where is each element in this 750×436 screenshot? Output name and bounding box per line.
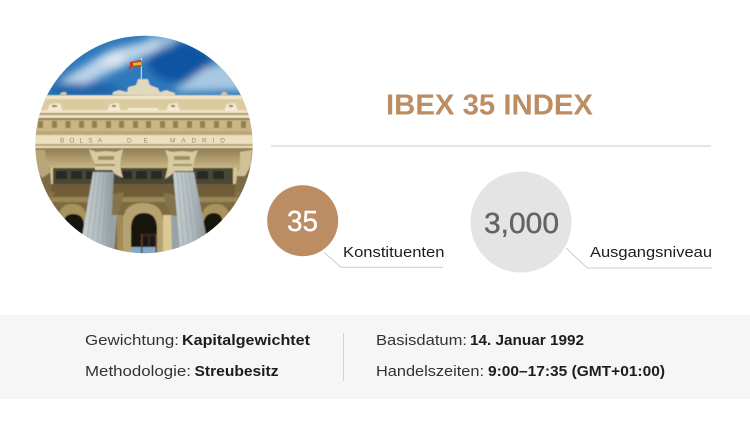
side capitals — [35, 150, 51, 178]
right arch — [201, 204, 229, 237]
label: Konstituenten: Konstituenten — [343, 244, 444, 261]
stat: constituents — [267, 185, 444, 267]
info: trading hours: Handelszeiten: — [376, 363, 484, 380]
lower capitals — [112, 192, 124, 214]
beam — [30, 184, 260, 197]
left arch — [59, 204, 86, 224]
info: base date — [376, 332, 584, 349]
info: base date: Basisdatum: — [376, 332, 467, 349]
coffered ceiling — [53, 168, 233, 184]
secondary columns — [110, 214, 118, 249]
center arch — [122, 202, 164, 252]
roof sculpture — [59, 79, 228, 96]
leader line — [566, 248, 712, 268]
inscription: MADRID — [170, 138, 225, 144]
badge: 3,000 — [470, 172, 572, 272]
inscription: DE — [127, 138, 149, 144]
leader line — [324, 252, 443, 267]
inscription: BOLSA — [60, 138, 103, 144]
value: 35: 35 — [287, 206, 318, 238]
side walls — [40, 166, 52, 195]
label: Ausgangsniveau: Ausgangsniveau — [590, 244, 712, 261]
sky — [44, 36, 244, 100]
main columns — [82, 172, 114, 250]
title: IBEX 35 INDEX — [386, 90, 594, 122]
info: methodology: Methodologie: — [85, 363, 191, 380]
stat: starting level — [470, 172, 712, 272]
soffit — [30, 148, 260, 168]
info: trading hours: 9:00–17:35 (GMT+01:00) — [488, 363, 665, 380]
main capitals — [89, 149, 123, 178]
divider line — [271, 145, 711, 147]
info: methodology — [85, 363, 278, 380]
info panel — [0, 315, 750, 399]
value: 3,000: 3,000 — [484, 208, 559, 240]
photo: Bolsa de Madrid building — [35, 36, 253, 254]
building facade and portico — [30, 95, 260, 260]
attic ornaments — [47, 103, 238, 111]
badge: 35 — [267, 185, 338, 256]
inscription — [60, 138, 225, 142]
info: base date: 14. Januar 1992 — [470, 332, 584, 349]
info: weighting — [85, 332, 310, 349]
info: methodology: Streubesitz — [194, 363, 278, 380]
info: weighting: Kapitalgewichtet — [182, 332, 310, 349]
wall panels — [116, 214, 124, 251]
modillions — [38, 121, 246, 128]
info: trading hours — [376, 363, 665, 380]
flag — [128, 58, 142, 79]
info: weighting: Gewichtung: — [85, 332, 179, 349]
